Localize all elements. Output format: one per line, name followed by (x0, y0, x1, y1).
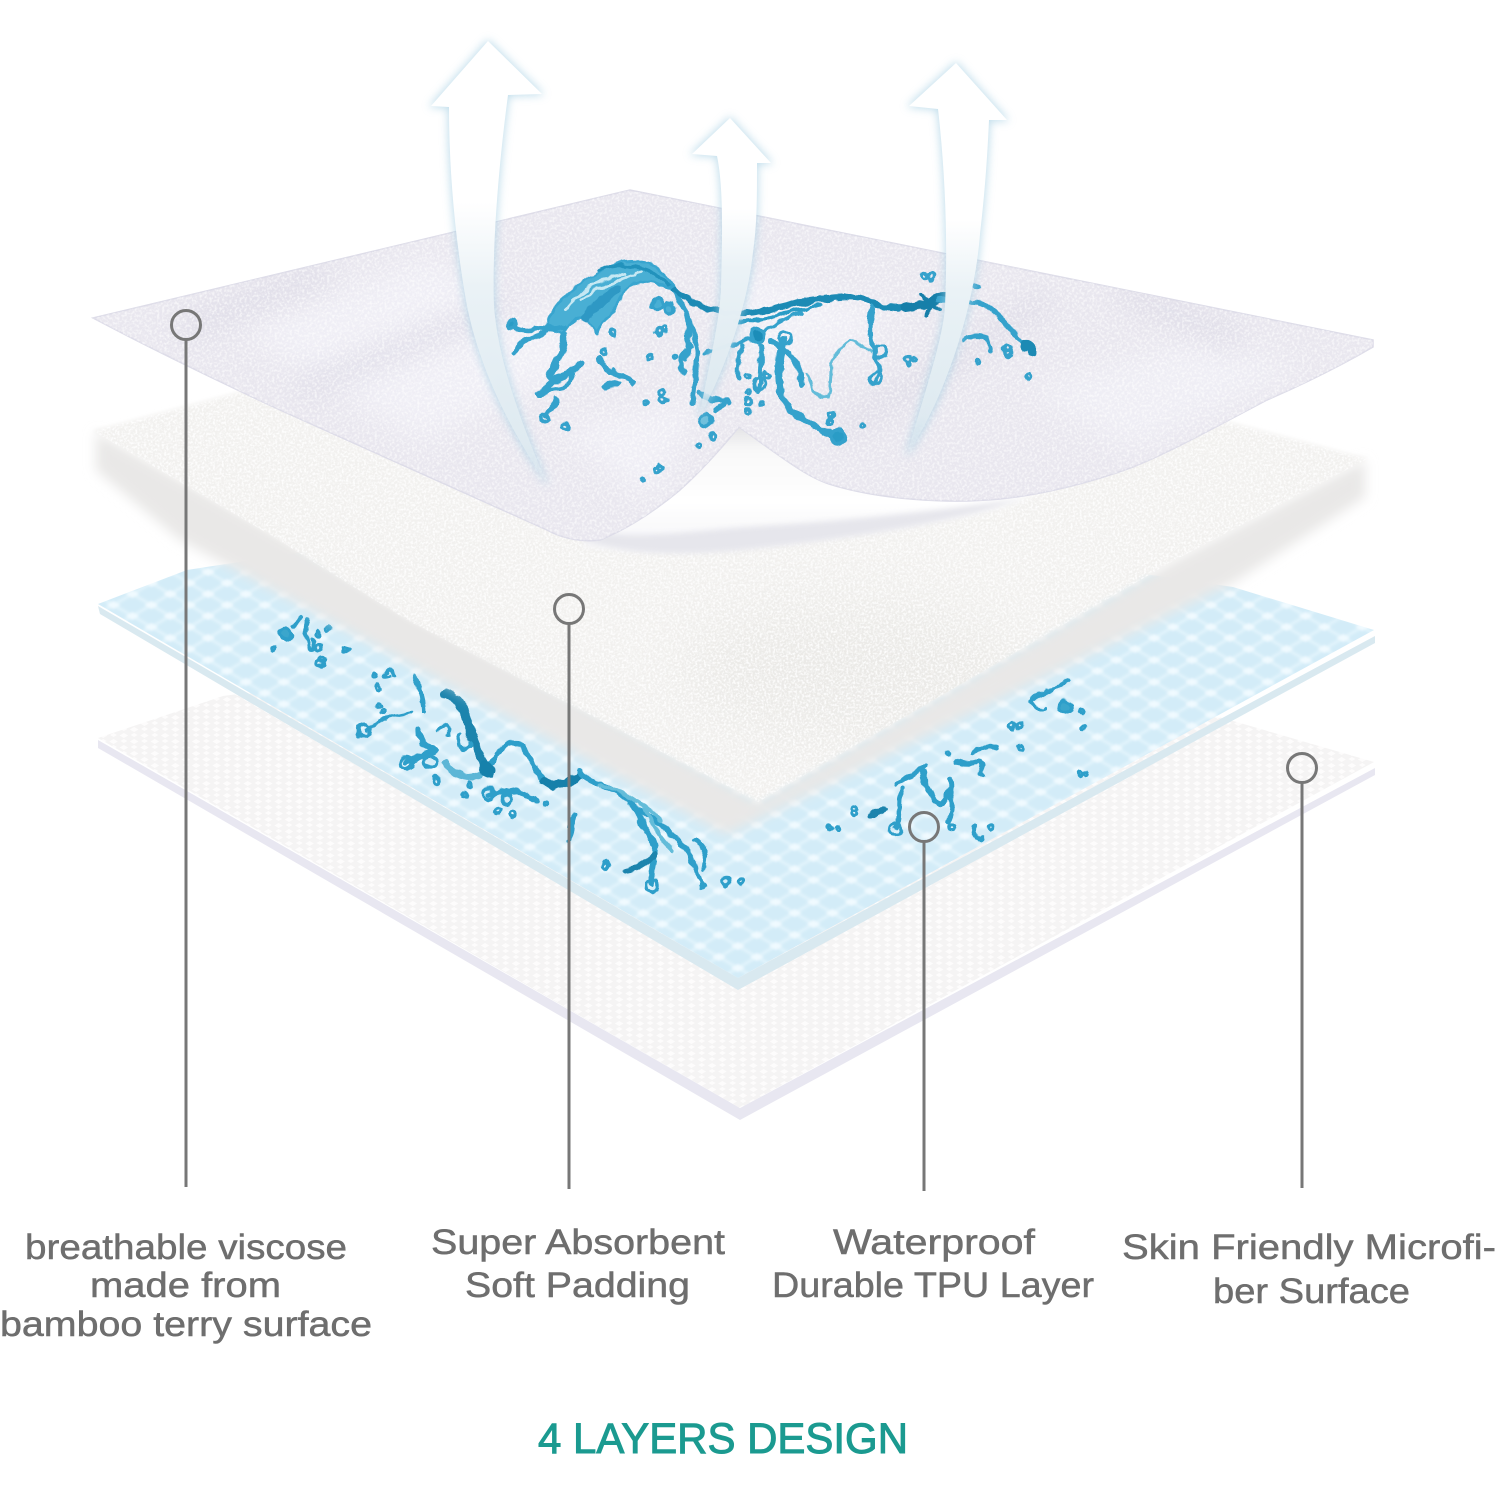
layer 2: absorbent soft padding (94, 392, 1367, 834)
water splash on top sheet (508, 261, 1032, 482)
label: waterproof TPU: Waterproof (833, 1223, 1035, 1262)
label: super absorbent padding: Super Absorbent (431, 1223, 725, 1262)
label: super absorbent padding: Soft Padding (465, 1266, 690, 1305)
label: microfiber surface: Skin Friendly Microfi- (1122, 1228, 1496, 1267)
water splash on blue layer, left (272, 616, 744, 892)
callout line: waterproof layer (910, 812, 938, 1191)
layer 4: microfiber bottom sheet (98, 640, 1375, 1120)
layer 1: white curl under sheet (575, 420, 1060, 553)
title: 4 LAYERS DESIGN (538, 1415, 908, 1463)
label: breathable viscose: bamboo terry surface (0, 1305, 372, 1344)
water splash on blue layer, right (828, 680, 1088, 839)
label: microfiber surface: ber Surface (1213, 1272, 1410, 1311)
label: super absorbent padding (431, 1223, 725, 1305)
label: microfiber surface (1122, 1228, 1496, 1311)
label: breathable viscose: made from (90, 1266, 281, 1305)
callout line: microfiber surface (1288, 754, 1316, 1188)
arrow: right breathability (907, 63, 1007, 455)
label: waterproof TPU (772, 1223, 1094, 1305)
arrow: middle breathability (692, 118, 771, 418)
label: waterproof TPU: Durable TPU Layer (772, 1266, 1094, 1305)
arrow: left breathability (431, 41, 547, 484)
callout line: padding (554, 594, 584, 1189)
label: breathable viscose: breathable viscose (25, 1228, 347, 1267)
layer 1: bamboo terry top sheet (90, 185, 1380, 550)
layer 3: waterproof TPU blue sheet (98, 564, 1375, 990)
callout line: top sheet (172, 310, 200, 1187)
label: breathable viscose (0, 1228, 372, 1344)
